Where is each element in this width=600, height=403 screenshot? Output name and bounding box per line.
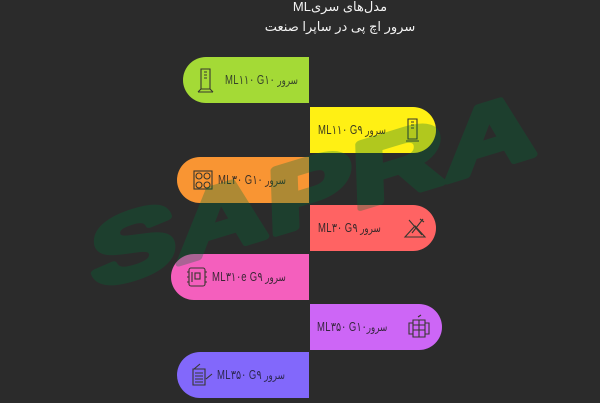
title [265, 0, 415, 34]
icon: chip [187, 268, 207, 286]
pill: ML350 G9 [177, 352, 309, 398]
watermark: SAPRA logo: SAPRA [89, 71, 537, 310]
icon: tower server [406, 118, 419, 142]
pill: ML30 G10 [177, 157, 309, 203]
label: ML۳۰ G۹ سرور [318, 221, 381, 235]
pill: ML350 G10 [310, 304, 442, 350]
icon: circuit panel [193, 170, 213, 190]
label: ML۳۵۰ G۱۰سرور [317, 320, 387, 334]
icon: tower server [198, 68, 214, 92]
icon: crossed tools [404, 218, 426, 238]
label: ML۳۰ G۱۰ سرور [218, 173, 286, 187]
pill: ML310e G9 [171, 254, 309, 300]
icon: server stack [408, 314, 430, 338]
icon: document stack [192, 364, 212, 386]
label: ML۳۱۰e G۹ سرور [212, 270, 286, 284]
pill: ML110 G9 [310, 107, 436, 153]
title: سرور اچ پی در ساپرا صنعت [265, 19, 415, 34]
label: ML۱۱۰ G۱۰ سرور [225, 73, 298, 87]
pill: ML110 G10 [183, 57, 309, 103]
pill: ML30 G9 [310, 205, 436, 251]
label: ML۱۱۰ G۹ سرور [318, 123, 386, 137]
label: ML۳۵۰ G۹ سرور [217, 368, 285, 382]
